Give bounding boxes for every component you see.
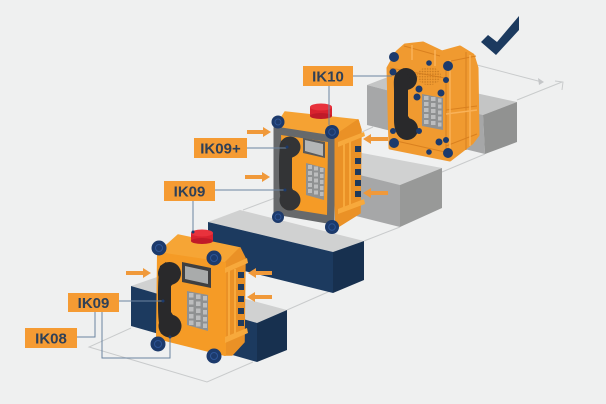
step block 4 (367, 75, 517, 154)
connector end dots (162, 146, 288, 338)
keypad (306, 163, 325, 200)
label: IK10 (303, 66, 353, 86)
handset (158, 262, 182, 338)
red button (191, 230, 213, 244)
screws (272, 116, 339, 234)
step block 1 (131, 276, 287, 362)
red button (310, 104, 332, 119)
step block 3 (340, 148, 442, 227)
handset (394, 68, 418, 140)
screws (150, 240, 222, 364)
label: IK10: IK10 (312, 68, 344, 86)
label: IK09 lower: IK09 (78, 295, 109, 312)
label: IK09 lower (68, 293, 119, 312)
label: IK09+ (194, 138, 247, 158)
connector lines (77, 76, 392, 358)
label: IK08 (25, 328, 77, 348)
display (303, 138, 325, 158)
screws (389, 52, 453, 158)
icon: check mark (481, 16, 519, 55)
label: IK09+: IK09+ (200, 140, 241, 158)
phone IK09 (150, 230, 248, 364)
speaker grille (417, 67, 441, 85)
arrowhead: base plane (538, 78, 544, 85)
side notches (355, 146, 361, 197)
step block 2 (208, 210, 364, 293)
label: IK09 upper (164, 181, 215, 201)
label: IK09 upper: IK09 (174, 184, 205, 200)
keypad (187, 291, 208, 331)
side notches (238, 272, 244, 326)
display (182, 262, 211, 288)
arrows: impact direction (126, 127, 388, 302)
phone IK09+ (272, 104, 365, 234)
label: IK08: IK08 (35, 330, 67, 348)
handset (279, 136, 300, 210)
phone IK10 (388, 43, 478, 160)
keypad (422, 94, 443, 130)
ridges (390, 46, 477, 155)
